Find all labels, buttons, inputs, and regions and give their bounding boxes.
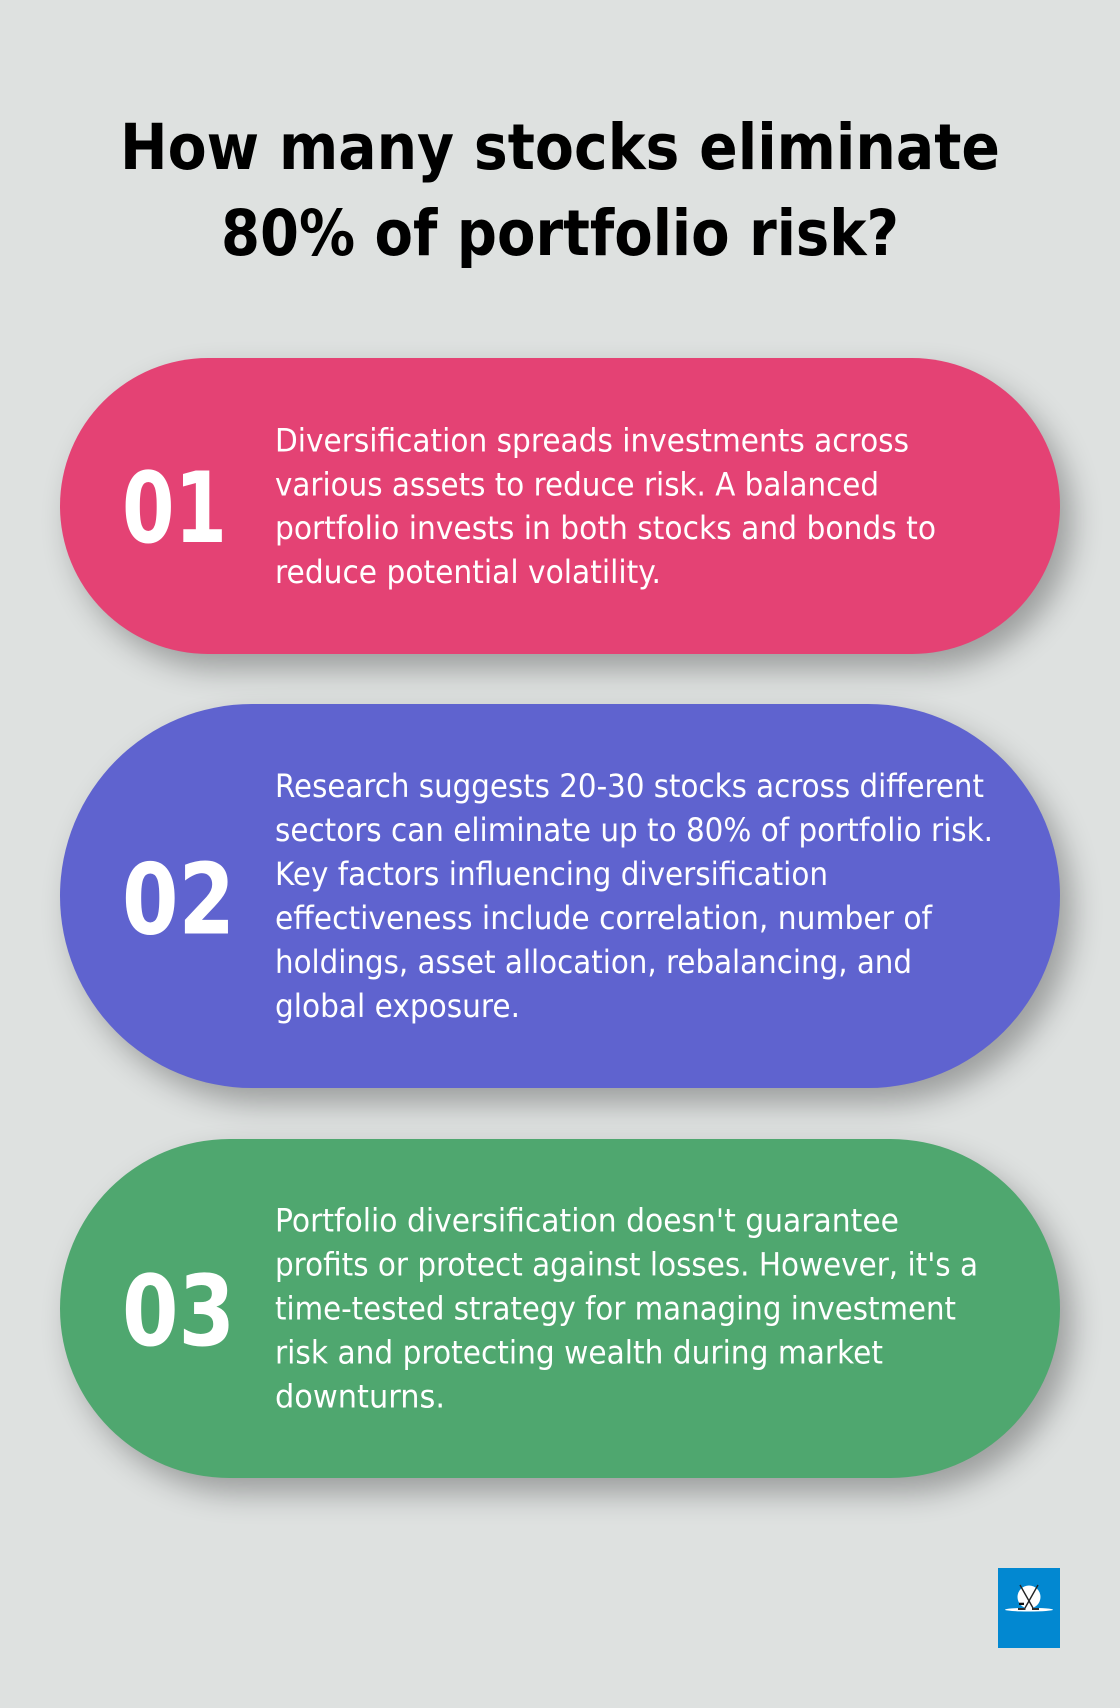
text block: step 01: Diversification spreads investments across: [275, 422, 909, 460]
text block: step 03: time-tested strategy for managing investment: [275, 1290, 956, 1328]
title: 80% of portfolio risk?: [221, 197, 899, 270]
step number 03: 03: [122, 1255, 235, 1369]
title: [120, 111, 1000, 270]
title: How many stocks eliminate: [120, 111, 1000, 184]
panel: step 01: [60, 358, 1060, 654]
panel: step 02: [60, 704, 1060, 1088]
text block: step 01: reduce potential volatility.: [275, 553, 661, 591]
text block: step 03: risk and protecting wealth during market: [275, 1334, 883, 1372]
text block: step 02: [275, 767, 993, 1025]
panel: step 03: [60, 1139, 1060, 1478]
text block: step 01: portfolio invests in both stocks and bonds to: [275, 509, 936, 547]
step number 01: 01: [122, 452, 227, 566]
text block: step 03: Portfolio diversification doesn't guarantee: [275, 1202, 899, 1240]
text block: step 02: global exposure.: [275, 987, 520, 1025]
text block: step 02: sectors can eliminate up to 80% of portfolio risk.: [275, 811, 993, 849]
text block: step 03: [275, 1202, 978, 1416]
text block: step 03: profits or protect against losses. However, it's a: [275, 1246, 978, 1284]
step number 02: 02: [122, 844, 235, 958]
text block: step 02: Research suggests 20-30 stocks across different: [275, 767, 984, 805]
text block: step 02: effectiveness include correlation, number of: [275, 899, 933, 937]
text block: step 03: downturns.: [275, 1378, 445, 1416]
icon: logo with crossed hockey sticks: [998, 1568, 1060, 1648]
text block: step 02: Key factors influencing diversification: [275, 855, 828, 893]
text block: step 02: holdings, asset allocation, rebalancing, and: [275, 943, 912, 981]
text block: step 01: [275, 422, 936, 591]
text block: step 01: various assets to reduce risk. A balanced: [275, 466, 879, 504]
